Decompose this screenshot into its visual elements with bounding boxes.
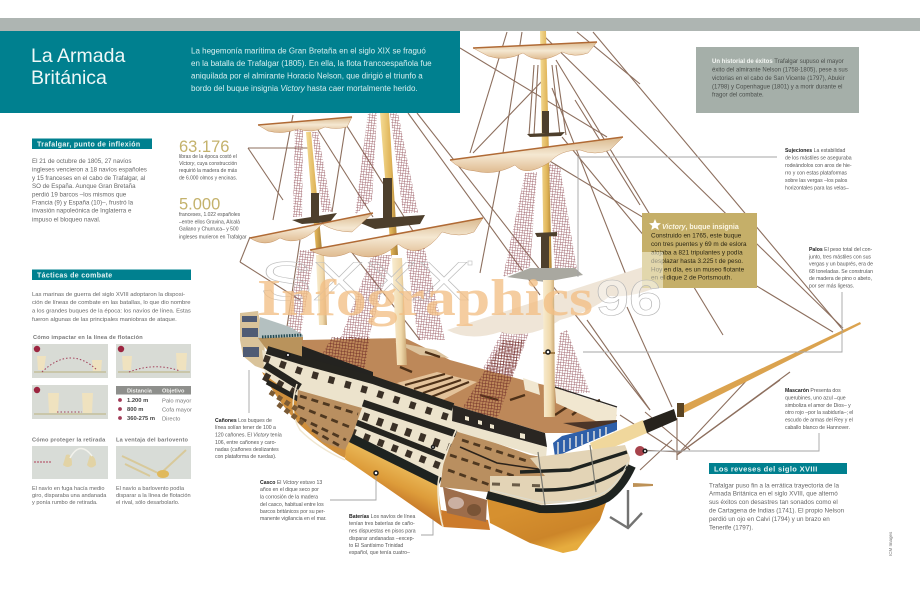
- panel: Trafalgar, punto de inflexión: Francia (9) y España (10)–, frustró la: [32, 200, 134, 207]
- callout: Victory, buque insignia: Construido en 1765, este buque: [651, 232, 742, 240]
- masts: [292, 31, 583, 325]
- panel: Los reveses del siglo XVIII: Los reveses del siglo XVIII: [714, 464, 818, 474]
- label: Cañones: con plataforma de ruedas).: [215, 454, 276, 460]
- label: Baterías: [349, 514, 416, 556]
- label: Casco: del casco, habitual entre los: [260, 502, 324, 508]
- credit: ICM Images: [888, 531, 893, 556]
- keel strip under ballast: [441, 510, 490, 530]
- label: Sujeciones: de los mástiles se aseguraba: [785, 156, 852, 162]
- callout: Un historial de éxitos: [696, 47, 859, 113]
- cutaway interior, stern side: [270, 384, 362, 460]
- callout: Victory, buque insignia: Hoy en día, es un museo flotante: [651, 266, 745, 274]
- caption: retreat: y ponía rumbo de retirada.: [32, 500, 98, 506]
- panel: Tácticas de combate: ción de líneas de combate en las batallas, lo que dio nombre: [32, 300, 191, 306]
- cutaway interior, bow side: [438, 428, 548, 527]
- caption: windward: [116, 486, 191, 506]
- panel: Trafalgar, punto de inflexión: y 15 franceses en el cabo de Trafalgar, al: [32, 175, 145, 182]
- table: distance and target: Distancia: [127, 388, 153, 394]
- panel: Los reveses del siglo XVIII: Tenerife (1797).: [709, 524, 753, 532]
- leader: Sujeciones: [578, 157, 777, 277]
- stat: 63.176: Victory, cuya construcción: [179, 161, 237, 167]
- caption: windward: el rival, sólo desarbolarlo.: [116, 500, 180, 506]
- header panel: [0, 31, 460, 113]
- panel: Los reveses del siglo XVIII: perdió un ojo en Calvi (1794) y un brazo en: [709, 516, 830, 523]
- callout: Un historial de éxitos: victorias en el cabo de San Vicente (1797), Abukir: [712, 76, 845, 82]
- stat: 5.000: –entre ellos Gravina, Alcalá: [179, 220, 240, 226]
- table: distance and target: Cofa mayor: [162, 408, 192, 414]
- diagram 3: [32, 385, 108, 419]
- label: Palos: por ser más ligeras.: [809, 284, 854, 290]
- callout: Un historial de éxitos: (1798) y Copenhague (1801) y a morir durante el: [712, 84, 842, 90]
- leader: Casco: [330, 476, 376, 500]
- leader: Palos: [583, 292, 842, 352]
- label: Palos: de madera de pino o abeto,: [809, 276, 872, 282]
- mast tops: [292, 111, 583, 282]
- label: Palos: junto, tres mástiles con sus: [808, 254, 871, 260]
- panel: Tácticas de combate: Las marinas de guerra del siglo XVIII adoptaron la disposi-: [32, 292, 185, 298]
- caption: retreat: El navío en fuga hacía medio: [32, 486, 104, 492]
- label: Sujeciones: [785, 148, 852, 192]
- leader: Baterías: [421, 520, 433, 535]
- table: distance and target: Palo mayor: [162, 398, 191, 404]
- panel: Trafalgar, punto de inflexión: ingleses vencieron a 18 navíos españoles: [32, 166, 147, 174]
- stat: 5.000: franceses, 1.022 españoles: [179, 212, 241, 218]
- intro text: La hegemonía marítima de Gran Bretaña en el siglo XIX se fraguó: [191, 46, 426, 56]
- label: Cañones: 120 cañones. El Victory tenía: [215, 432, 282, 438]
- subheading: retreat: Cómo proteger la retirada: [32, 438, 106, 444]
- panel: Trafalgar, punto de inflexión: SO de España. Aunque Gran Bretaña: [32, 183, 136, 190]
- watermark: [257, 250, 663, 327]
- panel: Trafalgar, punto de inflexión: invasión napoleónica de Inglaterra e: [32, 208, 132, 215]
- top grey band: [0, 18, 920, 31]
- label: Mascarón: querubines, uno azul –que: [785, 396, 846, 402]
- callout heading: Victory, buque insignia: [662, 224, 739, 231]
- stat: 5.000: Galiano y Churruca– y 500: [179, 226, 239, 232]
- panel: Tácticas de combate: a los grandes buques de la época: los navíos de línea. Estas: [32, 308, 191, 314]
- label: Casco: años en el dique seco por: [260, 487, 319, 493]
- hull gold section, midships: [345, 432, 443, 527]
- leader: Cañones: [248, 370, 250, 413]
- callout: Un historial de éxitos: Un historial de éxitos Trafalgar supuso el mayor: [712, 59, 844, 65]
- watermark: 96: [596, 270, 662, 326]
- intro text: aniquilada por el almirante Horacio Nelson, que dirigió el triunfo a: [191, 72, 423, 80]
- marker: Cañones: [286, 353, 290, 357]
- diagram 1: [32, 344, 108, 378]
- label: Baterías: nes dispuestas en pisos para: [349, 528, 416, 534]
- stat: 63.176: libras de la época costó el: [179, 154, 237, 160]
- label: Casco: Casco El Victory estuvo 13: [260, 480, 322, 486]
- label: Baterías: disparar andanadas –excep-: [349, 536, 414, 542]
- title: La Armada: [31, 45, 125, 67]
- caption: retreat: giro, disparaba una andanada: [32, 493, 107, 499]
- label: Palos: [808, 247, 873, 290]
- caption: retreat: [32, 486, 107, 506]
- label: Mascarón: caballo blanco de Hannover.: [785, 425, 850, 431]
- stat: 63.176: [179, 138, 238, 182]
- panel: Los reveses del siglo XVIII: Trafalgar puso fin a la errática trayectoria de la: [709, 482, 839, 490]
- panel: Trafalgar, punto de inflexión: [32, 138, 152, 223]
- rope nets: [286, 113, 590, 420]
- gun deck bands: [262, 350, 458, 482]
- table: distance and target: 360-275 m: [127, 416, 155, 422]
- marker: Baterías: [432, 446, 434, 448]
- label: Casco: manente vigilancia en el mar.: [260, 516, 327, 522]
- marker: Casco: [374, 471, 378, 475]
- stat: 63.176: de 6.000 olmos y encinas.: [179, 176, 237, 182]
- table: distance and target: 800 m: [127, 407, 143, 413]
- panel: Tácticas de combate: fueron algunas de las principales maniobras de ataque.: [32, 317, 177, 323]
- callout: Victory, buque insignia: desplazar hasta 3.225 t de peso.: [651, 258, 743, 265]
- callout: Un historial de éxitos: éxito del almirante Nelson (1758-1805), pese a sus: [712, 68, 848, 74]
- stat: 5.000: [179, 196, 247, 240]
- label: Sujeciones: rodeándolos con aros de hie-: [785, 163, 852, 169]
- caption: windward: El navío a barlovento podía: [116, 486, 185, 492]
- title: [31, 45, 125, 89]
- callout: Victory, buque insignia: [642, 213, 757, 288]
- stat: 63.176: requirió la madera de más: [179, 168, 238, 174]
- intro text: [191, 46, 432, 93]
- table: distance and target: [116, 386, 192, 422]
- label: Cañones: nadas (cañones deslizantes: [215, 447, 279, 453]
- subheading: windward: La ventaja del barlovento: [116, 438, 189, 444]
- callout: Victory, buque insignia: en el dique 2 de Portsmouth.: [651, 274, 732, 282]
- title: Británica: [31, 67, 107, 89]
- watermark: Infographics: [257, 270, 593, 327]
- rigging lines: [240, 32, 843, 470]
- intro text: bordo del buque insignia Victory hasta caer mortalmente herido.: [191, 84, 418, 93]
- panel: Trafalgar, punto de inflexión: El 21 de octubre de 1805, 27 navíos: [32, 158, 131, 165]
- panel: Trafalgar, punto de inflexión: Trafalgar, punto de inflexión: [37, 141, 140, 148]
- panel: Tácticas de combate: [32, 270, 192, 506]
- caption: windward: disparar a la línea de flotación: [116, 493, 191, 499]
- stat: 5.000: 5.000: [179, 196, 220, 214]
- label: Cañones: línea solían tener de 100 a: [215, 425, 276, 431]
- hull gold section, bow: [487, 498, 607, 553]
- label: Cañones: 106, entre cañones y caro-: [215, 440, 276, 446]
- label: Sujeciones: rro y con estas plataformas: [785, 170, 847, 176]
- hull lower edge, stern: [262, 372, 350, 458]
- marker: Palos: [546, 350, 550, 354]
- label: Palos: Palos El peso total del con-: [809, 247, 872, 253]
- panel: Trafalgar, punto de inflexión: perdió 19 barcos –los mismos que: [32, 192, 127, 199]
- panel: Los reveses del siglo XVIII: sus éxitos con desastres tan sonados como el: [709, 499, 838, 506]
- upper deck: [302, 337, 617, 433]
- table: distance and target: 1.200 m: [127, 398, 148, 404]
- label: Sujeciones: horizontales para las velas–: [785, 186, 849, 192]
- subheading: firing at the waterline: Cómo impactar en la línea de flotación: [33, 335, 143, 341]
- label: Sujeciones: Sujeciones La estabilidad: [785, 148, 845, 154]
- label: Cañones: Cañones Los buques de: [215, 418, 272, 424]
- label: Baterías: tenían tres baterías de caño-: [349, 521, 415, 527]
- label: Mascarón: Mascarón Presenta dos: [785, 388, 841, 394]
- label: Baterías: to El Santísimo Trinidad: [349, 543, 403, 549]
- label: Cañones: [215, 418, 282, 460]
- label: Sujeciones: sobre las vergas –los palos: [785, 178, 848, 184]
- lower mast stumps: [392, 258, 555, 417]
- label: Mascarón: simboliza el amor de Dios– y: [785, 403, 851, 409]
- diagram: retreat: [32, 446, 108, 479]
- label: Baterías: español, que tenía cuatro–: [349, 550, 410, 556]
- callout: Victory, buque insignia: alojaba a 821 tripulantes y podía: [651, 250, 743, 256]
- label: Casco: la corrosión de la madera: [260, 494, 318, 500]
- intro text: en la batalla de Trafalgar (1805). En ella, la flota francoespañola fue: [191, 59, 432, 68]
- forecastle and bow: [487, 378, 653, 509]
- diagram: windward: [116, 446, 191, 479]
- label: Palos: 68 toneladas. Se construían: [809, 269, 873, 275]
- panel: Tácticas de combate: Tácticas de combate: [37, 272, 113, 279]
- table: distance and target: Directo: [162, 416, 180, 422]
- midship wall and windows: [452, 405, 547, 458]
- sails: [250, 42, 660, 337]
- yards: [250, 42, 623, 250]
- label: Mascarón: escudo de armas del Rey y el: [785, 418, 853, 424]
- leader: Mascarón: [645, 433, 819, 451]
- panel: Trafalgar, punto de inflexión: impuso el bloqueo naval.: [32, 216, 101, 223]
- panel: Los reveses del siglo XVIII: de Cartagena de Indias (1741). El propio Nelson: [709, 508, 845, 514]
- illustration: HMS Victory cutaway ship: [240, 31, 861, 553]
- stat: 5.000: ingleses murieron en Trafalgar: [179, 234, 247, 240]
- marker: Mascarón: [643, 449, 647, 453]
- label: Baterías: Baterías Los navíos de línea: [349, 514, 415, 520]
- label: Mascarón: otro rojo –por la sabiduría–; el: [785, 410, 853, 416]
- panel: Los reveses del siglo XVIII: [709, 463, 847, 532]
- anchor: [610, 490, 642, 528]
- label: Casco: barcos británicos por su per-: [260, 509, 325, 515]
- stern gallery: [240, 311, 303, 370]
- callout: Un historial de éxitos: fragor del combate.: [712, 92, 764, 98]
- panel: Los reveses del siglo XVIII: Armada Británica en el siglo XVIII, que alternó: [709, 490, 838, 498]
- label: Casco: [260, 480, 327, 522]
- diagram 2: [116, 344, 191, 378]
- callout: Victory, buque insignia: con tres puentes y 69 m de eslora: [651, 241, 747, 248]
- stat: 63.176: 63.176: [179, 138, 229, 156]
- watermark: SXXX: [260, 250, 470, 312]
- table: distance and target: Objetivo: [162, 388, 185, 394]
- bowsprit: [590, 322, 861, 455]
- label: Mascarón: [785, 388, 853, 431]
- label: Palos: vergas y un bauprés, era de: [809, 262, 873, 268]
- icon: star: [649, 219, 661, 230]
